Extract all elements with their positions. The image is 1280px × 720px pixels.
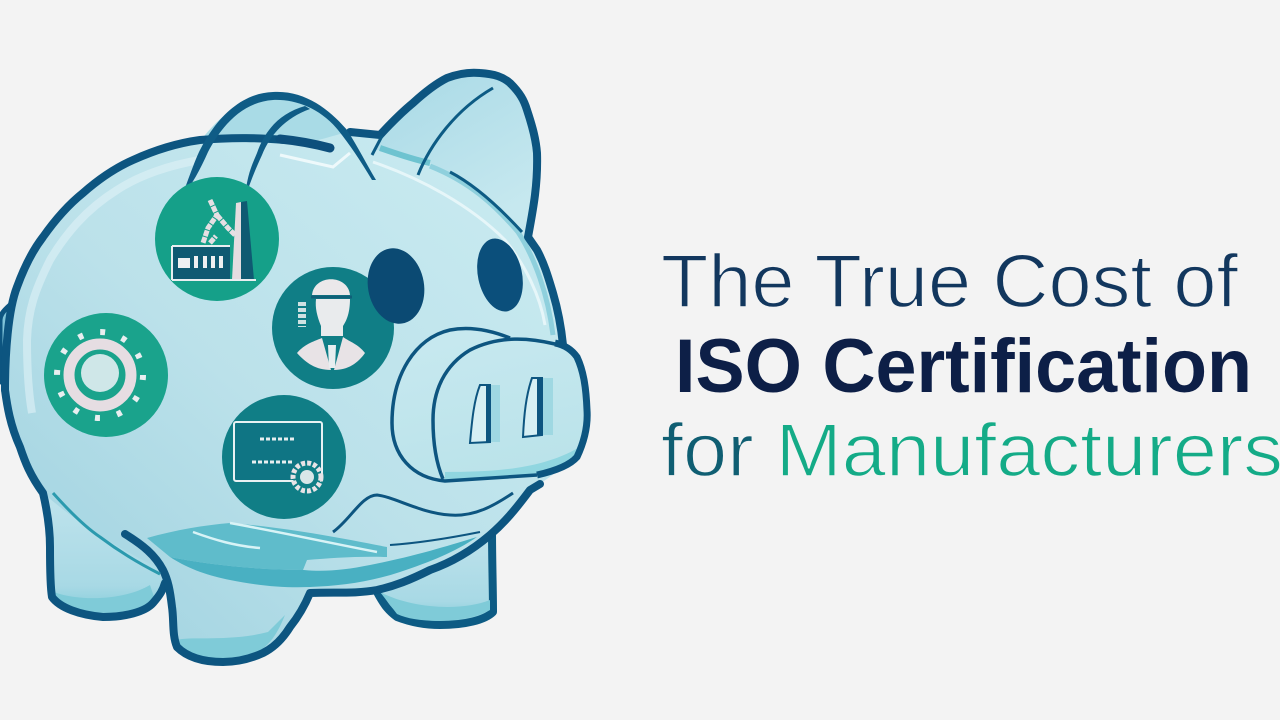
- back leg shading: [380, 592, 490, 621]
- ear lines: [372, 88, 522, 232]
- pig body: [5, 73, 575, 662]
- title line 3: for Manufacturers: [661, 408, 1280, 492]
- back right leg: [377, 530, 493, 625]
- pig illustration: [0, 73, 587, 662]
- right nostril: [523, 378, 542, 437]
- nostril shadows: [490, 378, 553, 442]
- tail stub: [0, 305, 10, 390]
- title line 1: The True Cost of: [661, 239, 1238, 323]
- title line 2: ISO Certification: [675, 324, 1252, 409]
- body highlights: [27, 148, 553, 413]
- icon: factory: [155, 177, 279, 301]
- title: [661, 239, 1280, 492]
- front leg shading: [177, 615, 285, 659]
- belly reflection: [53, 493, 480, 587]
- body outline: [5, 73, 563, 662]
- icon: engineer: [272, 267, 394, 389]
- eye left: [362, 244, 430, 328]
- eye right: [471, 234, 529, 316]
- left nostril: [470, 385, 490, 443]
- hump fill: [195, 93, 352, 148]
- icon: certificate: [222, 395, 346, 519]
- snout: [392, 328, 587, 481]
- icon: gear: [44, 313, 168, 437]
- ear fill: [375, 73, 537, 232]
- mouth line: [333, 493, 513, 532]
- handle strokes and coin slot: [182, 92, 376, 198]
- back left leg: [43, 493, 175, 617]
